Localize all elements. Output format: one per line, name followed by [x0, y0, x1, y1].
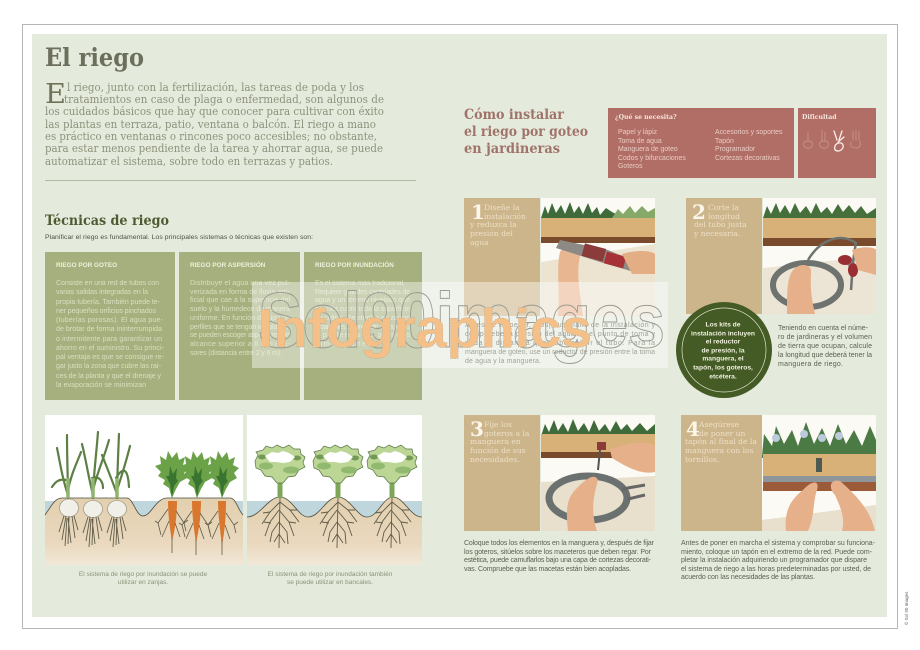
credit: © Sol 90 Images	[903, 591, 909, 625]
step 2 label	[686, 198, 762, 314]
panel: riego por aspersión: RIEGO POR ASPERSIÓN	[190, 260, 266, 269]
panel: riego por aspersión	[179, 252, 300, 400]
step 1 text: manguera de goteo, use un reductor de presión entre la toma	[465, 349, 655, 356]
panel: qué se necesita: ¿Qué se necesita?	[615, 114, 677, 121]
panel: qué se necesita: Manguera de goteo	[618, 146, 678, 153]
step 4 text	[681, 540, 876, 581]
panel: riego por inundación: permita cubrir toda la superficie	[315, 306, 410, 313]
step 2	[686, 198, 876, 368]
step 4 text: pletar la instalación adquiriendo un programador que dispare	[681, 557, 867, 564]
panel: riego por goteo: RIEGO POR GOTEO	[56, 262, 117, 269]
panel: qué se necesita: Goteros	[618, 163, 643, 170]
panel: riego por goteo: ces de la planta y que el drenaje y	[56, 373, 162, 380]
step 1	[464, 198, 656, 365]
panel: riego por goteo: ner pequeños orificios pinchados	[56, 308, 156, 315]
panel: riego por goteo: pal ventaja es que se consigue re-	[56, 354, 165, 361]
panel: riego por goteo: de brotar de forma ininterrumpida	[56, 326, 162, 333]
caption: right illustration: se puede utilizar en bancales.	[287, 579, 373, 586]
heading: cómo instalar: en jardineras	[464, 141, 560, 157]
step 2 text: de tierra que ocupan, calcule	[778, 343, 872, 350]
panel: riego por goteo: propia tubería. También puede te-	[56, 299, 161, 306]
panel: qué se necesita: Toma de agua	[618, 138, 662, 145]
step 3	[464, 415, 655, 573]
callout: kit de instalación: de presión, la	[701, 348, 745, 354]
step 4 label: Asegúrese	[698, 420, 740, 429]
callout: kit de instalación: etcétera.	[709, 374, 737, 380]
step 2 text	[778, 325, 872, 368]
step 3 text: los goteros, sitúelos sobre los maceteros que deben regar. Por	[464, 549, 652, 556]
step 3 label: Fije los	[484, 420, 512, 429]
panel: qué se necesita	[608, 108, 794, 178]
step 3 label: función de sus	[470, 446, 526, 455]
step 3 label: manguera en	[470, 437, 521, 446]
heading: cómo instalar: Cómo instalar	[464, 107, 565, 123]
step 1 text: mida la distancia que debe cubrir el tubo. Para la	[465, 340, 655, 347]
step 3 label: 3	[470, 417, 484, 441]
step 1 label: Diseñe la	[484, 203, 520, 212]
step 1 label	[464, 198, 540, 316]
step 4 label: tornillos.	[685, 455, 719, 464]
step 1 text: compruebe la presión del agua en el punto de toma y	[465, 331, 656, 338]
drop cap: E	[45, 79, 66, 110]
step 3 label: necesidades.	[470, 455, 520, 464]
title: El riego	[45, 43, 144, 72]
step 1 text: de agua y la manguera.	[465, 358, 541, 365]
plant: cabbages	[255, 445, 417, 548]
step 3 text: estética, puede camuflarlos bajo una capa de cortezas decorati-	[464, 557, 652, 564]
panel: riego por inundación: de cultivo. Se emplea en zanjas	[315, 315, 410, 322]
step 2 text: Teniendo en cuenta el núme-	[778, 325, 869, 332]
intro text block: tratamientos en caso de plaga o enfermedad, son algunos de	[64, 93, 384, 106]
step 3 label: goteros a la	[484, 429, 530, 438]
intro text block	[45, 79, 384, 168]
step 2 label: del tubo justa	[694, 220, 747, 229]
callout: kit de instalación	[676, 302, 772, 398]
step 1 illustration	[541, 198, 655, 316]
illustration: garlic and carrots in furrows	[45, 415, 243, 565]
panel: riego por goteo: (tuberías porosas). El agua pue-	[56, 317, 164, 324]
caption: left illustration: utilizar en zanjas.	[118, 579, 168, 586]
panel: riego por aspersión: perfiles que se tengan instalados,	[190, 324, 290, 331]
panel: riego por aspersión: uniforme. En función del tipo de	[190, 315, 290, 322]
panel: riego por aspersión: se pueden escoger aspersores de	[190, 332, 290, 339]
step 1 label: instalación	[484, 212, 526, 221]
caption: left illustration	[79, 571, 208, 586]
step 2 label: Corte la	[708, 203, 739, 212]
panel: qué se necesita: Codos y bifurcaciones	[618, 155, 686, 162]
step 4 label: tapón al final de la	[685, 437, 757, 446]
caption: right illustration: El sistema de riego por inundación también	[268, 571, 393, 578]
caption: left illustration: El sistema de riego por inundación se puede	[79, 571, 208, 578]
panel: riego por inundación: agua y un terreno nivelado que	[315, 297, 410, 304]
step 1 text: Antes de empezar, dibuje un plano de la instalación y	[465, 322, 656, 329]
step 4 text: el sistema de riego a las horas predeterminadas por usted, de	[681, 566, 871, 573]
step 1 label: presión del	[470, 229, 514, 238]
intro text block: automatizar el sistema, sobre todo en terrazas y patios.	[45, 155, 333, 168]
step 4	[681, 415, 876, 581]
intro text block: l riego, junto con la fertilización, las tareas de poda y los	[67, 81, 364, 94]
watermark: Infographics	[258, 297, 592, 359]
panel: riego por goteo: Consiste en una red de tubos con	[56, 280, 159, 287]
step 1 label: agua	[470, 238, 489, 247]
subheading: Planificar el riego es fundamental. Los principales sistemas o técnicas que existen son:	[45, 234, 313, 241]
panel: riego por goteo: la evaporación se minimizan	[56, 382, 146, 389]
illustration: cabbages on raised beds	[247, 415, 422, 565]
callout: kit de instalación: manguera, el	[702, 356, 744, 362]
step 4 label: 4	[686, 417, 700, 441]
step 2 illustration	[763, 198, 876, 314]
callout: kit de instalación: Los kits de	[706, 322, 741, 328]
panel: riego por goteo: ahorro en el suministro. Su princi-	[56, 345, 165, 352]
plant: garlic	[52, 432, 130, 547]
panel: riego por inundación: y bancales, sobre todo en huertos	[315, 324, 410, 331]
panel: riego por inundación: Requiere grandes cantidades de	[315, 289, 410, 296]
panel: riego por goteo: gar justo la zona que cubre las raí-	[56, 363, 162, 370]
panel: qué se necesita: Cortezas decorativas	[715, 155, 780, 162]
panel: dificultad	[798, 108, 876, 178]
panel: qué se necesita: Programador	[715, 146, 756, 153]
step 4 label: de poner un	[699, 429, 746, 438]
heading: cómo instalar	[464, 107, 588, 157]
step 2 text: la longitud que deberá tener la	[778, 352, 872, 359]
step 3 label	[464, 415, 540, 531]
callout: kit de instalación: tapón, los goteros,	[693, 364, 753, 372]
panel: riego por aspersión: ficial que cae a la superficie del	[190, 297, 290, 304]
panel: qué se necesita: Tapón	[715, 138, 734, 145]
step 4 label	[681, 415, 762, 531]
panel: qué se necesita: Papel y lápiz	[618, 129, 658, 136]
caption: right illustration	[268, 571, 393, 586]
step 4 label: manguera con los	[685, 446, 754, 455]
step 4 text: acuerdo con las necesidades de las plantas.	[681, 574, 815, 581]
panel: riego por aspersión: Distribuye el agua una vez pul-	[190, 280, 291, 287]
panel: riego por goteo: o intermitente para garantizar un	[56, 336, 162, 343]
watermark: Sol90images	[258, 276, 665, 364]
panel: riego por inundación: Es el sistema más tradicional.	[315, 280, 405, 287]
intro text block: para estar menos pendiente de la tarea y ahorrar agua, se puede	[45, 142, 383, 155]
panel: riego por goteo	[45, 252, 175, 400]
panel: riego por goteo: varias salidas integradas en la	[56, 289, 148, 296]
step 2 label: 2	[692, 200, 706, 224]
panel: qué se necesita: Accesorios y soportes	[715, 129, 783, 136]
callout: kit de instalación: el reductor	[706, 338, 741, 346]
step 4 text: miento, coloque un tapón en el extremo de la red. Puede com-	[681, 549, 873, 556]
step 3 text: vas. Compruebe que las macetas están bien acopladas.	[464, 566, 631, 573]
panel: riego por inundación: y parterres de grandes	[315, 332, 410, 339]
step 1 text	[465, 322, 656, 365]
plant: carrots	[155, 451, 239, 555]
intro text block: las plantas en terraza, patio, ventana o balcón. El riego a mano	[45, 118, 376, 131]
panel: riego por aspersión: alcance superior a 6 m o difu-	[190, 341, 291, 348]
step 3 text	[464, 540, 655, 573]
step 4 illustration	[762, 415, 876, 531]
step 2 text: ro de jardineras y el volumen	[778, 334, 872, 341]
panel: riego por aspersión: suelo y la humedece de manera	[190, 306, 290, 313]
step 1 label: 1	[471, 200, 485, 224]
panel: dificultad: Dificultad	[802, 114, 837, 121]
step 2 text: manguera de riego.	[778, 361, 843, 368]
panel: riego por inundación: RIEGO POR INUNDACIÓN	[315, 260, 394, 269]
step 2 label: y necesaria.	[693, 229, 740, 238]
callout: kit de instalación: instalación incluyen	[691, 330, 755, 338]
step 4 text: Antes de poner en marcha el sistema y comprobar su funciona-	[681, 540, 876, 547]
step 3 text: Coloque todos los elementos en la manguera y, después de fijar	[464, 540, 655, 547]
panel: riego por aspersión: verizada en forma de lluvia arti-	[190, 289, 291, 296]
step 3 illustration	[541, 415, 655, 531]
heading: técnicas de riego: Técnicas de riego	[45, 213, 169, 229]
heading: cómo instalar: el riego por goteo	[464, 124, 588, 140]
intro text block: es práctico en ventanas o rincones poco accesibles; no obstante,	[45, 130, 377, 143]
step 2 label: longitud	[708, 212, 740, 221]
icon: difficulty hands	[804, 130, 860, 151]
panel: riego por aspersión: sores (distancia entre 2 y 6 m).	[190, 350, 282, 357]
intro text block: los cuidados básicos que hay que conocer para cultivar con éxito	[45, 105, 384, 118]
panel: riego por inundación	[304, 252, 422, 400]
step 1 label: y reduzca la	[469, 220, 517, 229]
panel: riego por inundación: dimensiones.	[315, 341, 375, 348]
